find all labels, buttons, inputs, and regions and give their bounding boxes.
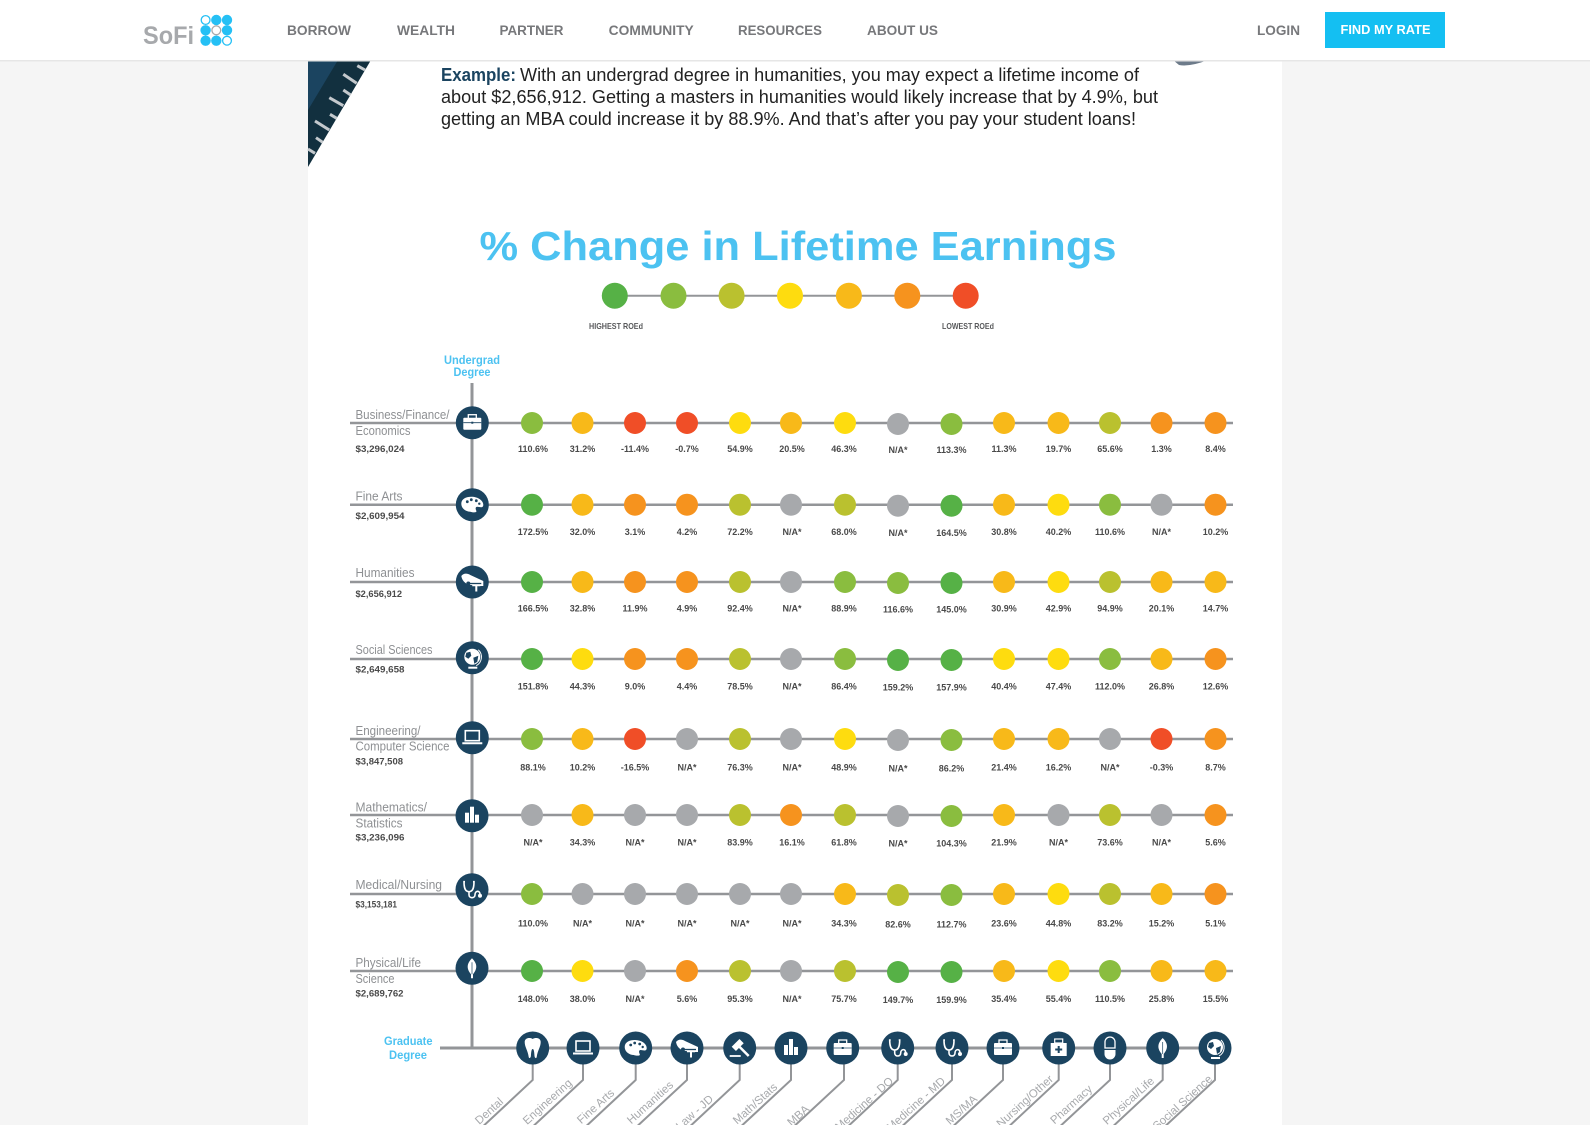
row: Physical/Life Science: $2,689,762: [356, 989, 404, 999]
row: Social Sciences: 12.6%: [1203, 681, 1228, 691]
row: Mathematics/Statistics: Mathematics/: [356, 800, 427, 814]
row: Humanities: 42.9%: [1046, 603, 1071, 613]
row: Humanities: 166.5%: [518, 603, 548, 613]
axis label: graduate degree: Graduate: [384, 1036, 432, 1048]
row: Medical/Nursing: N/A*: [625, 919, 645, 929]
row: Mathematics/Statistics: 34.3%: [570, 837, 595, 847]
illustration: pencil tip fragment: [1173, 60, 1208, 65]
row: Fine Arts: 10.2%: [1203, 527, 1228, 537]
nav links: PARTNER: [500, 23, 564, 38]
row: Social Sciences: 159.2%: [883, 682, 913, 692]
row: Humanities: 92.4%: [727, 603, 753, 613]
nav links: RESOURCES: [738, 23, 822, 38]
row: Social Sciences: [350, 641, 1233, 692]
row: Engineering/Computer Science: N/A*: [782, 762, 802, 772]
row: Physical/Life Science: 15.5%: [1203, 994, 1228, 1004]
row: Physical/Life Science: Physical/Life: [356, 956, 421, 970]
nav links: WEALTH: [397, 23, 455, 38]
button: find my rate: [1325, 12, 1445, 48]
row: Humanities: 20.1%: [1149, 603, 1174, 613]
row: Business/Finance/Economics: [350, 406, 1233, 455]
text block: example: Example:: [441, 64, 516, 85]
row: Engineering/Computer Science: 48.9%: [831, 762, 857, 772]
row: Medical/Nursing: N/A*: [573, 919, 592, 929]
row: Mathematics/Statistics: N/A*: [523, 837, 543, 847]
row: Medical/Nursing: 34.3%: [831, 919, 857, 929]
row: Medical/Nursing: 110.0%: [518, 919, 548, 929]
row: Fine Arts: 68.0%: [831, 527, 857, 537]
axis label: graduate degree: Degree: [389, 1050, 427, 1062]
row: Engineering/Computer Science: 10.2%: [570, 762, 595, 772]
row: Medical/Nursing: N/A*: [782, 919, 802, 929]
button: find my rate: FIND MY RATE: [1340, 22, 1431, 37]
row: Business/Finance/Economics: 110.6%: [518, 444, 548, 454]
row: Business/Finance/Economics: 65.6%: [1097, 444, 1123, 454]
row: Mathematics/Statistics: 16.1%: [779, 837, 805, 847]
row: Engineering/Computer Science: 88.1%: [520, 762, 546, 772]
row: Mathematics/Statistics: Statistics: [356, 816, 402, 830]
row: Humanities: 32.8%: [570, 603, 595, 613]
nav links: LOGIN: [1257, 23, 1300, 38]
row: Fine Arts: 32.0%: [570, 527, 595, 537]
row: Engineering/Computer Science: Computer Science: [356, 740, 450, 754]
row: Physical/Life Science: 75.7%: [831, 994, 857, 1004]
row: Fine Arts: $2,609,954: [356, 511, 404, 521]
row: Social Sciences: $2,649,658: [356, 664, 404, 674]
nav links: COMMUNITY: [609, 23, 694, 38]
axis label: undergrad degree: [444, 355, 500, 379]
row: Engineering/Computer Science: $3,847,508: [356, 756, 403, 766]
row: Fine Arts: 164.5%: [936, 528, 967, 538]
row: Physical/Life Science: N/A*: [625, 994, 645, 1004]
row: Business/Finance/Economics: 46.3%: [831, 444, 857, 454]
row: Social Sciences: 44.3%: [570, 681, 595, 691]
row: Business/Finance/Economics: N/A*: [888, 445, 908, 455]
row: Social Sciences: 4.4%: [677, 681, 697, 691]
text block: example: With an undergrad degree in humanities, you may expect a lifetime income of: [520, 64, 1140, 85]
row: Engineering/Computer Science: N/A*: [1100, 762, 1120, 772]
row: Social Sciences: 157.9%: [936, 682, 967, 692]
row: Physical/Life Science: Science: [356, 972, 395, 986]
row: Engineering/Computer Science: 86.2%: [939, 763, 964, 773]
row: Engineering/Computer Science: N/A*: [677, 762, 697, 772]
row: Business/Finance/Economics: 54.9%: [727, 444, 753, 454]
row: Engineering/Computer Science: -0.3%: [1150, 762, 1173, 772]
row: Humanities: 145.0%: [936, 604, 967, 614]
row: Mathematics/Statistics: 83.9%: [727, 837, 753, 847]
row: Business/Finance/Economics: 31.2%: [570, 444, 595, 454]
row: Humanities: 11.9%: [622, 603, 648, 613]
row: Fine Arts: [350, 488, 1233, 538]
row: Humanities: 88.9%: [831, 603, 857, 613]
row: Humanities: 116.6%: [883, 604, 913, 614]
row: Physical/Life Science: 95.3%: [727, 994, 753, 1004]
row: Engineering/Computer Science: -16.5%: [621, 762, 649, 772]
row: Medical/Nursing: 112.7%: [936, 920, 967, 930]
text block: example: [441, 64, 1158, 129]
row: Fine Arts: Fine Arts: [356, 489, 402, 503]
row: Physical/Life Science: [350, 952, 1233, 1005]
row: Fine Arts: 30.8%: [991, 527, 1017, 537]
legend: ROEd colour scale: HIGHEST ROEd: [589, 321, 643, 331]
row: Mathematics/Statistics: [350, 799, 1233, 848]
logo: SoFi: [143, 15, 232, 50]
row: Fine Arts: 172.5%: [518, 527, 548, 537]
row: Fine Arts: 110.6%: [1095, 527, 1125, 537]
row: Fine Arts: 40.2%: [1046, 527, 1071, 537]
nav links: ABOUT US: [867, 23, 938, 38]
row: Business/Finance/Economics: Economics: [356, 424, 410, 438]
row: Engineering/Computer Science: [350, 721, 1233, 773]
row: Mathematics/Statistics: N/A*: [625, 837, 645, 847]
row: Physical/Life Science: 5.6%: [677, 994, 697, 1004]
graduate degree labels: [473, 1073, 1215, 1125]
row: Mathematics/Statistics: 73.6%: [1097, 837, 1123, 847]
axis label: undergrad degree: Undergrad: [444, 355, 500, 367]
row: Business/Finance/Economics: -11.4%: [621, 444, 649, 454]
axis label: undergrad degree: Degree: [454, 367, 490, 379]
row: Humanities: Humanities: [356, 566, 414, 580]
panel: white infographic column: [308, 0, 1282, 1125]
row: Business/Finance/Economics: 20.5%: [779, 444, 805, 454]
row: Mathematics/Statistics: 104.3%: [936, 838, 967, 848]
row: Physical/Life Science: 110.5%: [1095, 994, 1125, 1004]
axis: undergrad vertical line: [470, 383, 474, 1048]
graduate degree leader lines: [478, 1048, 1215, 1125]
row: Social Sciences: Social Sciences: [356, 643, 432, 657]
row: Mathematics/Statistics: 21.9%: [991, 837, 1017, 847]
row: Business/Finance/Economics: 1.3%: [1151, 444, 1172, 454]
row: Fine Arts: 3.1%: [625, 527, 645, 537]
row: Business/Finance/Economics: 113.3%: [936, 445, 967, 455]
row: Business/Finance/Economics: Business/Finance/: [356, 408, 450, 422]
row: Fine Arts: 4.2%: [677, 527, 697, 537]
row: Fine Arts: N/A*: [1152, 527, 1171, 537]
row: Humanities: 30.9%: [991, 603, 1017, 613]
row: Social Sciences: 112.0%: [1095, 681, 1125, 691]
row: Mathematics/Statistics: $3,236,096: [356, 832, 404, 842]
legend: ROEd colour scale: LOWEST ROEd: [942, 321, 994, 331]
nav links: [287, 23, 1300, 38]
row: Physical/Life Science: 148.0%: [518, 994, 548, 1004]
row: Mathematics/Statistics: 61.8%: [831, 837, 857, 847]
row: Business/Finance/Economics: -0.7%: [675, 444, 699, 454]
row: Engineering/Computer Science: 21.4%: [991, 762, 1017, 772]
row: Medical/Nursing: 83.2%: [1097, 919, 1123, 929]
nav links: BORROW: [287, 23, 351, 38]
row: Social Sciences: 26.8%: [1149, 681, 1174, 691]
row: Physical/Life Science: 55.4%: [1046, 994, 1071, 1004]
row: Engineering/Computer Science: 8.7%: [1205, 762, 1226, 772]
text block: example: about $2,656,912. Getting a masters in humanities would likely increase that by 4.9%, but: [441, 86, 1158, 107]
row: Engineering/Computer Science: 16.2%: [1046, 762, 1071, 772]
row: Physical/Life Science: 35.4%: [991, 994, 1017, 1004]
row: Business/Finance/Economics: 11.3%: [991, 444, 1017, 454]
axis: graduate horizontal line: [440, 1046, 1215, 1050]
row: Humanities: N/A*: [782, 603, 802, 613]
row: Physical/Life Science: 159.9%: [936, 995, 967, 1005]
text block: example: getting an MBA could increase it by 88.9%. And that’s after you pay your student loans!: [441, 108, 1136, 129]
row: Medical/Nursing: Medical/Nursing: [356, 878, 442, 892]
row: Fine Arts: N/A*: [782, 527, 802, 537]
row: Medical/Nursing: N/A*: [677, 919, 697, 929]
row: Engineering/Computer Science: Engineering/: [356, 724, 421, 738]
row: Social Sciences: N/A*: [782, 681, 802, 691]
row: Mathematics/Statistics: N/A*: [888, 838, 908, 848]
row: Fine Arts: N/A*: [888, 528, 908, 538]
axis label: graduate degree: [384, 1036, 432, 1062]
logo: SoFi: SoFi: [143, 22, 194, 50]
row: Social Sciences: 9.0%: [625, 681, 645, 691]
row: Social Sciences: 151.8%: [518, 681, 548, 691]
row: Social Sciences: 86.4%: [831, 681, 857, 691]
row: Engineering/Computer Science: N/A*: [888, 763, 908, 773]
row: Business/Finance/Economics: $3,296,024: [356, 444, 404, 454]
illustration: ruler corner: [308, 60, 371, 167]
row: Medical/Nursing: 82.6%: [885, 920, 911, 930]
row: Physical/Life Science: 38.0%: [570, 994, 595, 1004]
row: Physical/Life Science: 149.7%: [883, 995, 913, 1005]
graduate degree icons: [516, 1032, 1232, 1064]
row: Mathematics/Statistics: N/A*: [1152, 837, 1171, 847]
legend: ROEd colour scale: [589, 283, 994, 331]
row: Humanities: $2,656,912: [356, 589, 402, 599]
row: Business/Finance/Economics: 19.7%: [1046, 444, 1071, 454]
row: Physical/Life Science: 25.8%: [1149, 994, 1174, 1004]
row: Engineering/Computer Science: 76.3%: [727, 762, 753, 772]
row: Medical/Nursing: $3,153,181: [356, 900, 397, 910]
row: Medical/Nursing: N/A*: [730, 919, 750, 929]
row: Physical/Life Science: N/A*: [782, 994, 802, 1004]
navigation bar: [0, 0, 1590, 62]
row: Medical/Nursing: 23.6%: [991, 919, 1017, 929]
row: Business/Finance/Economics: 8.4%: [1205, 444, 1226, 454]
row: Medical/Nursing: 5.1%: [1205, 919, 1226, 929]
title: % Change in Lifetime Earnings: [480, 223, 1116, 269]
row: Social Sciences: 40.4%: [991, 681, 1017, 691]
row: Mathematics/Statistics: N/A*: [1049, 837, 1068, 847]
row: Social Sciences: 78.5%: [727, 681, 753, 691]
row: Humanities: [350, 566, 1233, 614]
row: Social Sciences: 47.4%: [1046, 681, 1071, 691]
row: Medical/Nursing: 44.8%: [1046, 919, 1071, 929]
row: Medical/Nursing: [350, 873, 1233, 930]
row: Fine Arts: 72.2%: [727, 527, 753, 537]
row: Humanities: 94.9%: [1097, 603, 1123, 613]
row: Humanities: 4.9%: [677, 603, 697, 613]
row: Mathematics/Statistics: N/A*: [677, 837, 697, 847]
row: Humanities: 14.7%: [1203, 603, 1228, 613]
row: Medical/Nursing: 15.2%: [1149, 919, 1174, 929]
row: Mathematics/Statistics: 5.6%: [1205, 837, 1226, 847]
